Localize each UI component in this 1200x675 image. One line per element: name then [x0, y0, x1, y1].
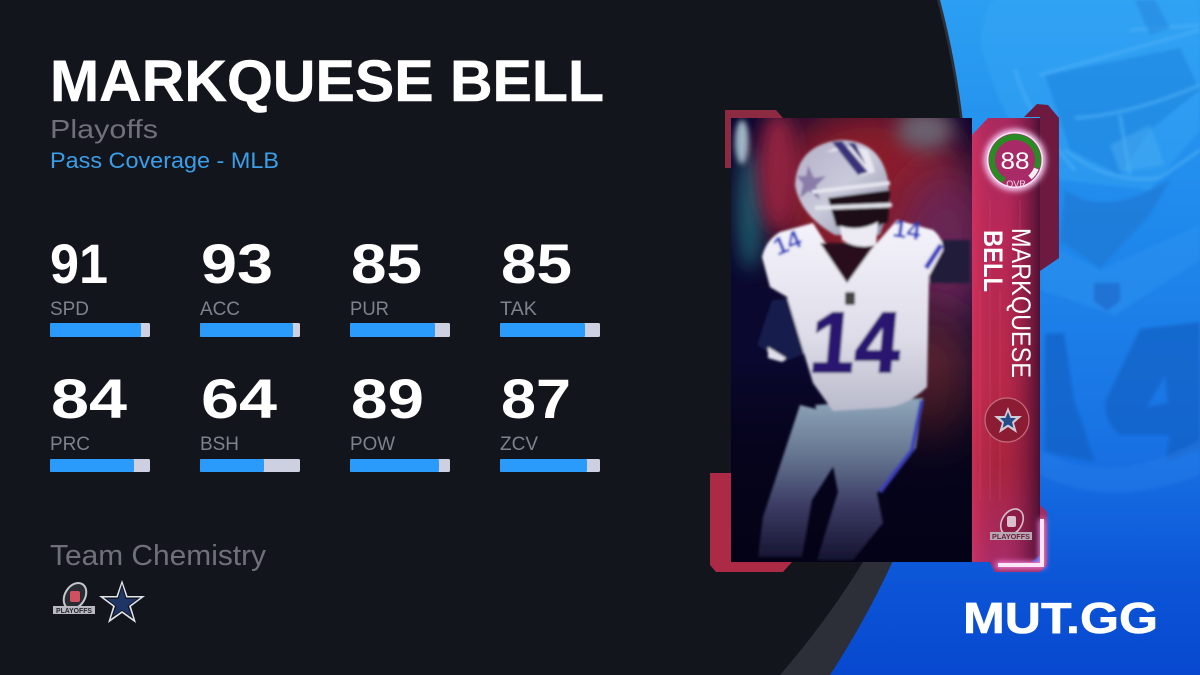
- far arm: [930, 240, 970, 283]
- facemask: [812, 183, 892, 208]
- stat: SPD: [50, 232, 150, 337]
- right leg: [815, 398, 923, 560]
- icon: playoffs logo: PLAYOFFS: [56, 608, 92, 615]
- face opening: [828, 190, 890, 232]
- stat: PUR: [350, 232, 450, 337]
- stat: PUR: 85: [351, 232, 422, 295]
- stat: BSH: [200, 367, 300, 472]
- player card: [710, 104, 1059, 572]
- ghost facemask: [1015, 25, 1200, 179]
- background: ghost player: [980, 0, 1200, 492]
- icon: playoffs logo on card: PLAYOFFS: [992, 534, 1030, 541]
- stat: ZCV: [500, 367, 600, 472]
- overall rating badge: 88: [1000, 148, 1030, 175]
- stat: ACC: ACC: [200, 299, 240, 320]
- stat: TAK: [500, 232, 600, 337]
- stat: TAK: TAK: [500, 299, 537, 320]
- title: MARKQUESE BELL: [50, 49, 604, 114]
- ghost shoulders: [1040, 225, 1200, 315]
- stat: ACC: [200, 232, 300, 337]
- left leg: [758, 405, 840, 557]
- ghost number 14: [1045, 333, 1095, 462]
- stat: BSH: 64: [201, 367, 277, 430]
- heading: team chemistry: Team Chemistry: [50, 540, 267, 572]
- icon: team badge: [985, 398, 1029, 442]
- card side strip: [972, 118, 1040, 562]
- jersey: [762, 220, 943, 411]
- nfl shield: [845, 292, 855, 305]
- card corner glow: [996, 519, 1042, 565]
- stat: PRC: 84: [51, 367, 127, 430]
- stat: PRC: PRC: [50, 434, 90, 455]
- stat: ZCV: ZCV: [500, 434, 538, 455]
- stat: PRC: [50, 367, 150, 472]
- icon: playoffs logo on card: [990, 505, 1032, 541]
- player figure: 14: [891, 214, 923, 246]
- overall rating badge: [984, 129, 1046, 191]
- stat: ACC: 93: [201, 232, 273, 295]
- ghost shield: [1094, 283, 1120, 311]
- player figure: 14: [769, 225, 806, 262]
- subtitle: program: Playoffs: [50, 114, 158, 144]
- stat: PUR: PUR: [350, 299, 389, 320]
- card frame accents: [710, 104, 1059, 572]
- ghost helmet: [980, 0, 1200, 190]
- logo: MUT.GG: MUT.GG: [963, 594, 1158, 643]
- stat: BSH: BSH: [200, 434, 239, 455]
- stat: POW: [350, 367, 450, 472]
- player last name: BELL: [978, 230, 1008, 292]
- jersey numbers: 14: [806, 295, 905, 391]
- helmet: [795, 140, 890, 235]
- subtitle: position: Pass Coverage - MLB: [50, 148, 279, 173]
- stat: SPD: SPD: [50, 299, 89, 320]
- stat: POW: POW: [350, 434, 395, 455]
- stat: ZCV: 87: [501, 367, 571, 430]
- card photo: [731, 105, 990, 562]
- player first name: MARKQUESE: [1006, 228, 1036, 378]
- icon: cowboys star: [99, 580, 145, 623]
- stat: POW: 89: [351, 367, 424, 430]
- ghost face: [1045, 48, 1200, 175]
- pants stripe: [880, 400, 922, 492]
- overall rating badge: OVR: [1006, 179, 1026, 189]
- stat: TAK: 85: [501, 232, 572, 295]
- chin: [840, 222, 878, 247]
- near arm and glove: [757, 298, 812, 362]
- stat: SPD: 91: [50, 232, 108, 295]
- sleeve stripe: [926, 245, 941, 268]
- player figure: [757, 140, 970, 560]
- neck: [820, 243, 876, 283]
- icon: playoffs logo: [53, 579, 95, 615]
